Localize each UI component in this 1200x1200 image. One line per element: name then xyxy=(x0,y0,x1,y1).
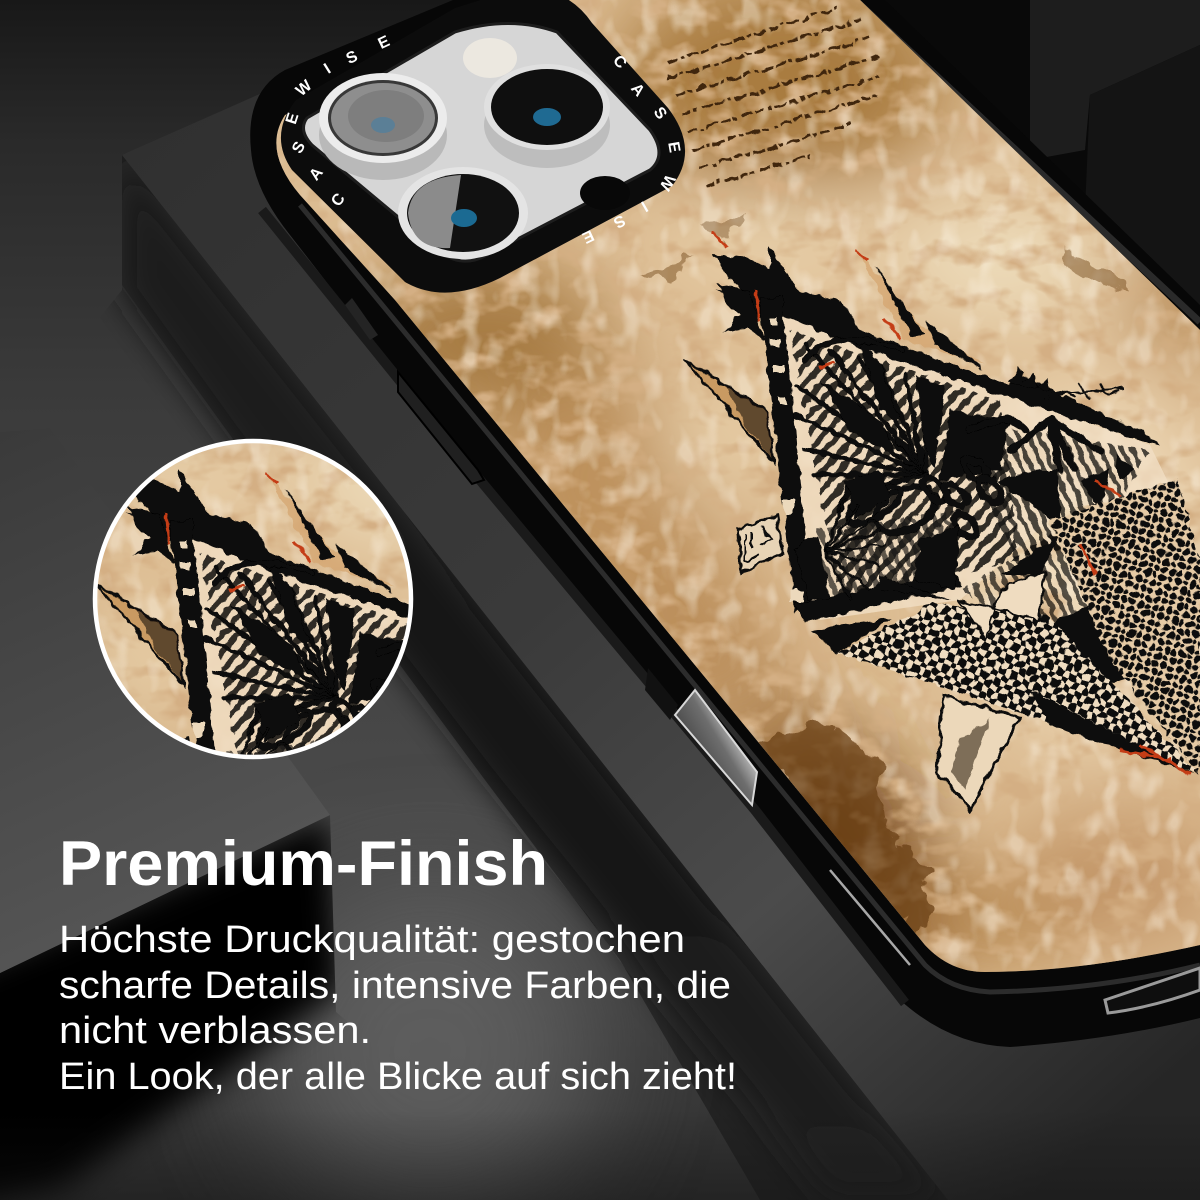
charging port xyxy=(1105,968,1200,1013)
body text xyxy=(59,919,737,1098)
body text: Höchste Druckqualität: gestochen xyxy=(59,919,685,961)
flash xyxy=(463,38,517,78)
lens one xyxy=(319,73,447,180)
CASEWISE ring lettering: C xyxy=(328,190,349,210)
island frame xyxy=(281,0,685,293)
phone case body xyxy=(250,0,1200,1047)
CASEWISE ring lettering: S xyxy=(289,139,309,157)
body text: Ein Look, der alle Blicke auf sich zieht! xyxy=(59,1056,737,1098)
title: Premium-Finish xyxy=(59,829,548,899)
CASEWISE ring lettering: S xyxy=(610,211,628,231)
CASEWISE ring lettering: S xyxy=(650,104,670,123)
CASEWISE ring lettering: W xyxy=(655,171,678,194)
printed parchment artwork xyxy=(200,0,1200,980)
body text: scharfe Details, intensive Farben, die xyxy=(59,965,731,1007)
CASEWISE ring lettering: I xyxy=(638,197,650,214)
CASEWISE ring lettering: E xyxy=(283,111,303,126)
volume button xyxy=(398,372,484,484)
CASEWISE ring lettering: I xyxy=(321,61,334,78)
detail zoom circle xyxy=(92,438,414,760)
CASEWISE ring lettering: A xyxy=(306,164,327,184)
CASEWISE ring lettering: E xyxy=(579,226,596,246)
lens three xyxy=(398,167,528,259)
CASEWISE ring lettering: E xyxy=(664,140,683,154)
camera island xyxy=(281,0,685,293)
body text: nicht verblassen. xyxy=(59,1010,371,1052)
island window xyxy=(303,24,659,261)
CASEWISE ring lettering: A xyxy=(627,80,648,100)
CASEWISE ring lettering: E xyxy=(376,33,393,53)
CASEWISE ring lettering: S xyxy=(344,48,361,68)
CASEWISE ring lettering: W xyxy=(293,77,316,100)
mic hole xyxy=(580,176,630,210)
silver button xyxy=(675,690,757,805)
side switch xyxy=(345,298,378,340)
lens two xyxy=(484,64,610,168)
CASEWISE ring lettering xyxy=(283,33,683,246)
CASEWISE ring lettering: C xyxy=(609,52,630,72)
